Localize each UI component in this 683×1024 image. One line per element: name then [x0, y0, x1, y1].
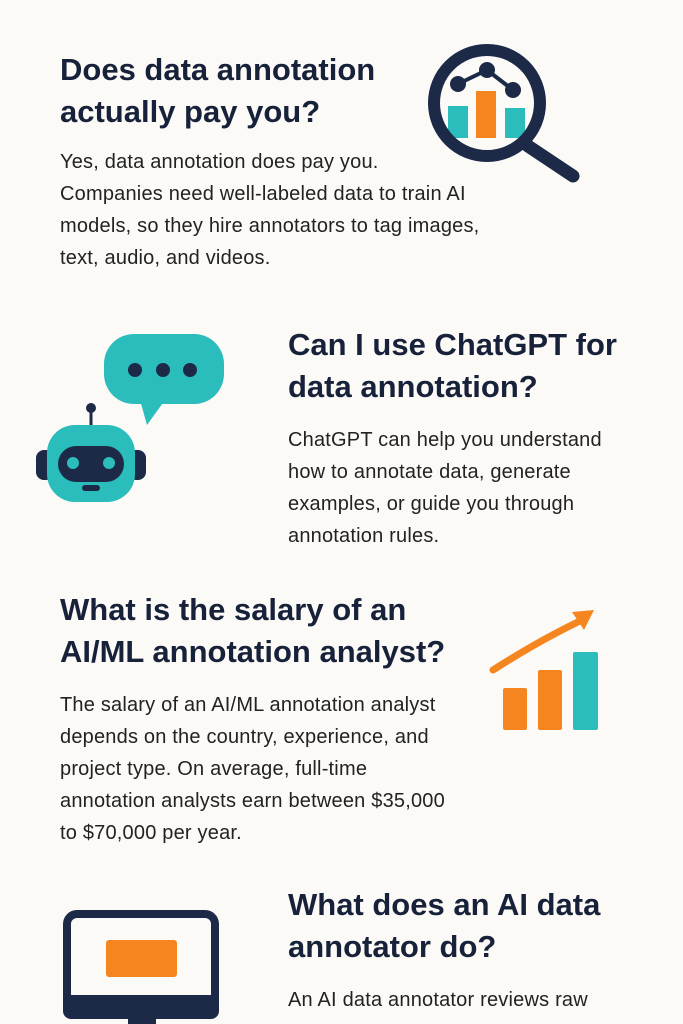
heading 4 — [288, 887, 601, 964]
heading 3 — [60, 592, 445, 669]
heading 4: What does an AI data — [288, 887, 600, 922]
text 1: Companies need well-labeled data to train AI — [60, 183, 466, 205]
text 3: to $70,000 per year. — [60, 822, 242, 844]
text 2: annotation rules. — [288, 525, 439, 547]
text 1: Yes, data annotation does pay you. — [60, 151, 379, 173]
text 1 — [60, 151, 479, 269]
text 2: examples, or guide you through — [288, 493, 574, 515]
heading 3: AI/ML annotation analyst? — [60, 634, 445, 669]
text 1: models, so they hire annotators to tag images, — [60, 215, 479, 237]
text 3: annotation analysts earn between $35,000 — [60, 790, 445, 812]
text 3: depends on the country, experience, and — [60, 726, 429, 748]
icon: magnifier chart — [434, 50, 573, 176]
heading 3: What is the salary of an — [60, 592, 406, 627]
text 2 — [288, 429, 602, 547]
icon: growth chart — [493, 610, 598, 730]
icon: robot with speech bubble — [36, 334, 224, 502]
text 3: project type. On average, full-time — [60, 758, 367, 780]
heading 2 — [288, 327, 617, 404]
icon: monitor — [63, 914, 219, 1024]
text 3: The salary of an AI/ML annotation analyst — [60, 694, 435, 716]
heading 2: Can I use ChatGPT for — [288, 327, 617, 362]
heading 1 — [60, 52, 375, 129]
text 2: ChatGPT can help you understand — [288, 429, 602, 451]
heading 2: data annotation? — [288, 369, 538, 404]
text 3 — [60, 694, 445, 844]
heading 1: Does data annotation — [60, 52, 375, 87]
text 4: An AI data annotator reviews raw — [288, 989, 588, 1011]
heading 4: annotator do? — [288, 929, 496, 964]
text 1: text, audio, and videos. — [60, 247, 270, 269]
heading 1: actually pay you? — [60, 94, 320, 129]
text 2: how to annotate data, generate — [288, 461, 571, 483]
